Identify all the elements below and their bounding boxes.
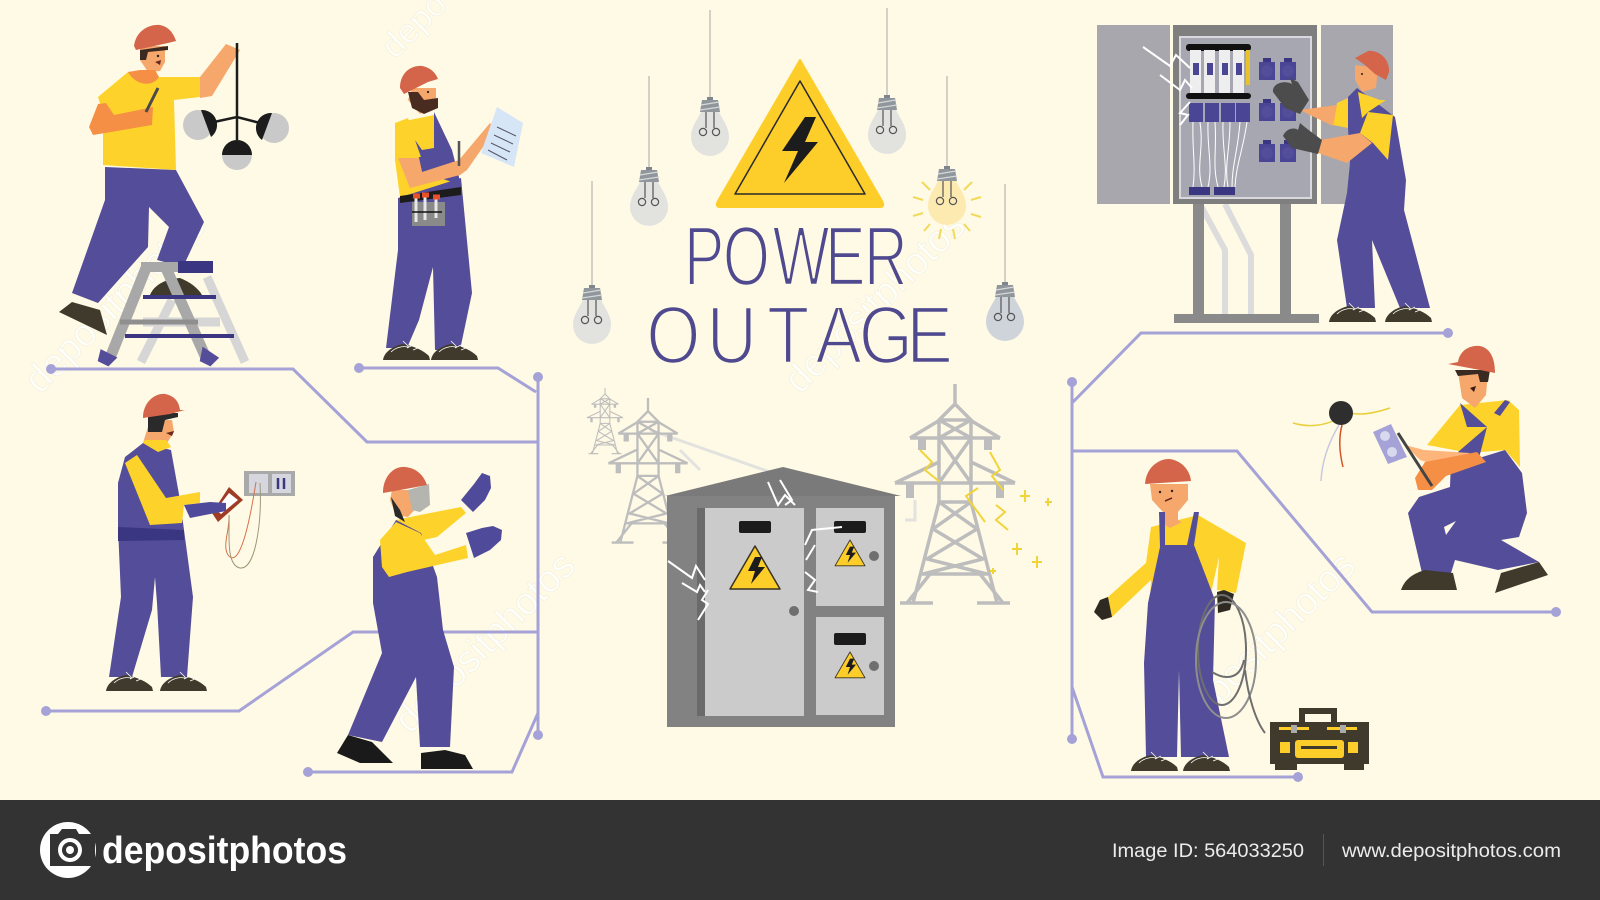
worker: reading notes xyxy=(383,66,523,360)
shirt xyxy=(98,72,200,170)
sleeve xyxy=(125,455,200,525)
shirt xyxy=(380,522,468,577)
title xyxy=(646,209,953,381)
site url: www.depositphotos.com xyxy=(1341,841,1561,862)
shoe xyxy=(59,302,107,335)
worker: chandelier on ladder xyxy=(59,25,289,364)
hard hat xyxy=(1145,459,1191,484)
upper right door xyxy=(816,508,884,606)
pylon small xyxy=(587,388,623,454)
sleeve xyxy=(395,118,421,157)
cable coil xyxy=(1196,595,1265,733)
electrical cabinet xyxy=(1097,25,1393,323)
lightning bolt xyxy=(782,117,818,183)
ladder front xyxy=(110,268,206,358)
socket xyxy=(1373,424,1407,464)
watermark xyxy=(17,0,1364,741)
footer bar xyxy=(0,800,1600,900)
overalls xyxy=(1408,403,1539,573)
shoes xyxy=(1329,303,1376,322)
title: OUTAGE xyxy=(646,290,953,381)
worker: panel xyxy=(1273,51,1432,322)
head and beard xyxy=(408,88,436,114)
neck and head xyxy=(1150,484,1188,528)
overalls xyxy=(1337,88,1430,308)
shoes xyxy=(1401,570,1457,590)
toolbox xyxy=(1270,708,1369,770)
hard hat xyxy=(1355,51,1389,80)
shirt xyxy=(395,115,460,197)
worker: face shield xyxy=(337,467,502,769)
hard hat xyxy=(1448,346,1495,373)
arm and screwdriver xyxy=(89,103,153,135)
stand xyxy=(1200,204,1251,314)
belt xyxy=(118,527,184,541)
logo mark xyxy=(40,822,96,878)
electric arcs xyxy=(668,480,842,620)
arm xyxy=(1405,445,1470,466)
worker: crouching xyxy=(1293,346,1548,593)
glove xyxy=(184,502,226,518)
shirt xyxy=(1333,98,1348,128)
bib xyxy=(415,112,461,185)
watermark: depositphotos xyxy=(1167,544,1364,741)
main door xyxy=(705,508,804,716)
watermark: depositphotos xyxy=(777,204,974,401)
substation xyxy=(665,467,901,727)
paper xyxy=(481,107,523,167)
image id: Image ID: 564033250 xyxy=(1112,841,1304,862)
breakers xyxy=(1186,44,1251,99)
hanging bulbs xyxy=(573,8,1024,344)
watermark: depositphotos xyxy=(17,204,214,401)
pylon large xyxy=(895,384,1015,603)
power lines xyxy=(650,430,915,520)
terminals and cables xyxy=(1189,103,1250,195)
overalls xyxy=(386,178,472,350)
hard hat xyxy=(143,394,185,418)
shoes xyxy=(383,341,430,360)
worker: socket tester xyxy=(106,394,295,691)
overalls xyxy=(1144,512,1229,757)
shirt xyxy=(1427,400,1520,467)
circuit lines xyxy=(41,328,1561,782)
shoe behind ladder xyxy=(150,278,202,295)
head and visor xyxy=(390,490,419,517)
doors xyxy=(1097,25,1170,204)
lower right door xyxy=(816,617,884,715)
hard hat xyxy=(400,66,438,94)
hard hat xyxy=(383,467,427,493)
pylon medium xyxy=(608,398,688,543)
hard hat xyxy=(134,25,176,50)
pants xyxy=(72,167,204,303)
overalls xyxy=(348,520,454,747)
sparks xyxy=(920,450,1052,574)
overalls xyxy=(109,443,193,677)
arm up xyxy=(396,507,466,545)
socket panel xyxy=(244,471,295,496)
title: POWER xyxy=(684,209,908,303)
sockets xyxy=(1259,58,1296,162)
worker: cable coil xyxy=(1094,459,1265,771)
ladder back legs xyxy=(141,277,245,362)
shoes xyxy=(1131,752,1178,771)
head xyxy=(140,46,165,72)
head xyxy=(1458,372,1488,408)
sleeves xyxy=(1108,515,1246,620)
tool pouch xyxy=(412,195,445,226)
roof xyxy=(665,467,901,496)
gloves xyxy=(1094,597,1112,620)
warning triangle xyxy=(717,60,883,207)
gloves xyxy=(1273,78,1309,114)
box xyxy=(1173,25,1317,204)
arms xyxy=(1300,105,1337,126)
belt xyxy=(400,187,461,203)
wires xyxy=(226,482,260,568)
watermark: depositphotos xyxy=(387,544,584,741)
logo wordmark: depositphotos xyxy=(102,830,347,872)
wires and junction xyxy=(1293,401,1390,481)
gloves xyxy=(461,473,491,512)
arcs xyxy=(1143,47,1192,125)
shoes xyxy=(337,735,393,763)
shoes xyxy=(106,672,153,691)
chandelier xyxy=(183,43,289,170)
head xyxy=(1355,65,1378,92)
arm xyxy=(398,123,494,188)
neck and face xyxy=(143,420,174,450)
raised arm xyxy=(200,44,240,98)
meter xyxy=(212,487,243,522)
